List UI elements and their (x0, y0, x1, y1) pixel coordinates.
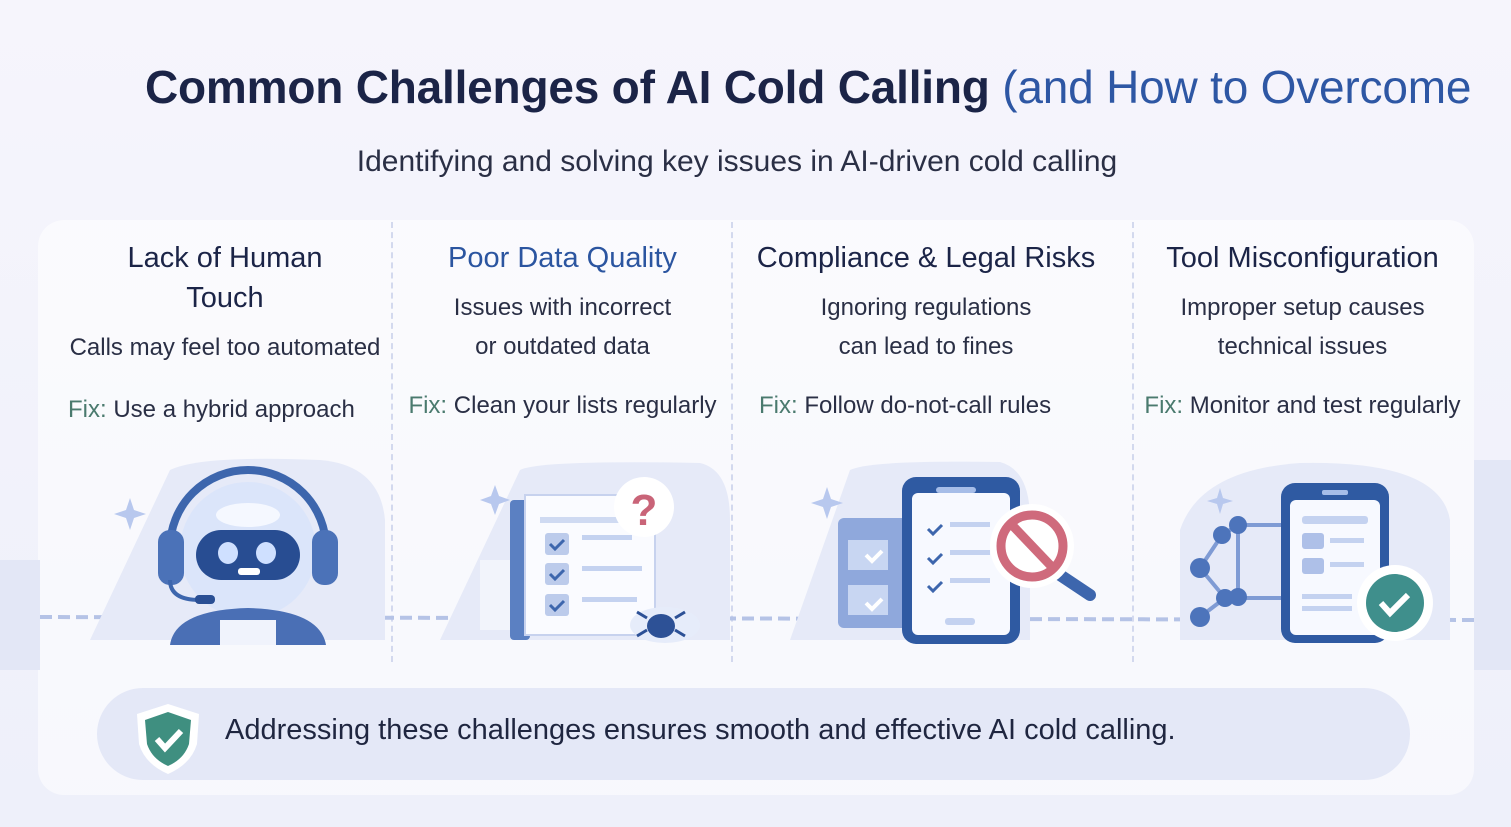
panel: compliance: Compliance & Legal Risks (757, 242, 1095, 274)
panel: poor data quality: Fix: Clean your lists regularly (408, 392, 717, 419)
illustrations (0, 458, 1511, 670)
title: Common Challenges of AI Cold Calling (and How to Overcome (145, 61, 1471, 113)
icon: checklist with question and bug: ? (631, 486, 657, 535)
icon: checklist with question and bug (440, 462, 730, 643)
callout: conclusion banner (97, 688, 1410, 780)
panel: compliance (757, 242, 1095, 419)
panel: lack of human touch: Calls may feel too automated (70, 334, 380, 361)
panel: poor data quality: Issues with incorrect (454, 294, 671, 321)
panel: compliance: Fix: Follow do-not-call rules (759, 392, 1051, 419)
panel: tool misconfiguration: Tool Misconfiguration (1166, 242, 1439, 274)
panel: poor data quality: Poor Data Quality (448, 242, 677, 274)
panel: lack of human touch: Touch (186, 282, 264, 314)
icon: shield check (137, 704, 199, 774)
icon: robot headset (90, 459, 385, 645)
icon: phone with prohibition sign (790, 462, 1090, 644)
panel: tool misconfiguration: Improper setup causes (1180, 294, 1425, 321)
subtitle: Identifying and solving key issues in AI-driven cold calling (357, 145, 1117, 178)
panel: poor data quality: or outdated data (475, 333, 650, 360)
panel: tool misconfiguration: Fix: Monitor and test regularly (1144, 392, 1461, 419)
panel: compliance: Ignoring regulations (821, 294, 1031, 321)
panel: main card (38, 220, 1474, 795)
panel: tool misconfiguration: technical issues (1218, 333, 1387, 360)
panel: compliance: can lead to fines (839, 333, 1013, 360)
panel: tool misconfiguration (1144, 242, 1461, 419)
panel: lack of human touch (68, 242, 380, 423)
icon: phone with network and check (1180, 463, 1450, 643)
panel: poor data quality (408, 242, 717, 419)
text: conclusion: Addressing these challenges ensures smooth and effective AI cold calling. (225, 714, 1176, 746)
panel: lack of human touch: Fix: Use a hybrid approach (68, 396, 355, 423)
panel: lack of human touch: Lack of Human (127, 242, 323, 274)
